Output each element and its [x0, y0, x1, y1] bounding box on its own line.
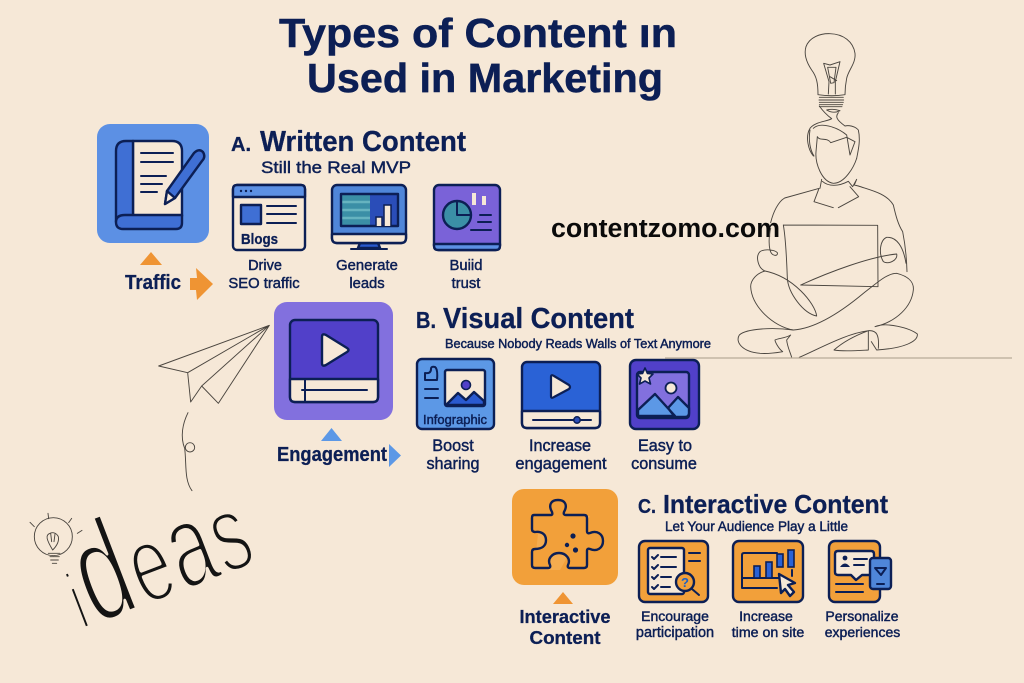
- icon: puzzle piece tile: [512, 489, 618, 585]
- heading: written content: Written Content: [260, 126, 466, 158]
- labels: interactive content benefits: time on site: [732, 625, 804, 641]
- label: traffic: Traffic: [125, 272, 181, 294]
- labels: written content benefits: Drive: [248, 258, 282, 274]
- label: interactive content: Interactive: [520, 606, 610, 627]
- heading: interactive content: C.: [638, 496, 656, 518]
- labels: written content benefits: [228, 258, 482, 292]
- icon: monitor dashboard: [332, 185, 406, 249]
- heading: interactive content: Interactive Content: [663, 489, 888, 519]
- title: Types of Content ın: [279, 10, 677, 56]
- title: [279, 10, 677, 101]
- icon: orange up triangle: [553, 592, 573, 604]
- icon: quiz checklist: ?: [681, 575, 689, 590]
- arrow: engagement: [389, 444, 401, 467]
- labels: written content benefits: Buiid: [450, 258, 482, 274]
- label: engagement: Engagement: [277, 444, 387, 466]
- icon: video player tile: [274, 302, 393, 420]
- labels: written content benefits: SEO traffic: [228, 276, 300, 292]
- panel: interactive content: [512, 489, 900, 648]
- labels: visual content benefits: consume: [631, 455, 697, 473]
- handwritten word: ideas: ideas: [37, 444, 272, 659]
- floor line: [665, 357, 1012, 359]
- icon: orange up triangle: [140, 252, 162, 265]
- labels: interactive content benefits: Personalize: [825, 608, 899, 624]
- labels: written content benefits: Generate: [336, 258, 398, 274]
- labels: interactive content benefits: [636, 608, 900, 641]
- subtitle: let your audience play a little: Let Your Audience Play a Little: [665, 519, 848, 534]
- label: interactive content: [520, 606, 610, 648]
- panel: visual content: [274, 302, 711, 473]
- illustration: paper plane with trail: [159, 325, 269, 491]
- icon: chart with cursor: [733, 541, 803, 602]
- icon: quiz checklist: [639, 541, 708, 602]
- heading: visual content: Visual Content: [443, 303, 634, 335]
- icon: notebook and pencil tile: [97, 124, 209, 243]
- icon: blogs browser: [233, 185, 305, 250]
- labels: visual content benefits: Boost: [432, 437, 474, 455]
- labels: visual content benefits: sharing: [426, 455, 480, 473]
- label: interactive content: Content: [530, 627, 600, 648]
- title: Used in Marketing: [307, 55, 663, 101]
- illustration: small lightbulb: [30, 513, 82, 563]
- icon: blue up triangle: [321, 428, 342, 441]
- labels: interactive content benefits: Increase: [739, 608, 793, 624]
- icon: blogs browser: Blogs: [241, 232, 278, 248]
- labels: written content benefits: trust: [452, 276, 480, 292]
- icon: image with star: [630, 360, 699, 429]
- panel: written content: [97, 124, 500, 300]
- labels: interactive content benefits: participation: [636, 625, 714, 641]
- labels: visual content benefits: Increase: [529, 437, 591, 455]
- labels: visual content benefits: Easy to: [638, 437, 692, 455]
- labels: written content benefits: leads: [349, 276, 385, 292]
- labels: visual content benefits: engagement: [515, 455, 607, 473]
- icon: infographic: Infographic: [423, 413, 487, 427]
- subtitle: still the real mvp: Still the Real MVP: [261, 158, 411, 177]
- icon: trust report: [434, 185, 500, 250]
- website label: contentzomo.com: [551, 215, 780, 243]
- arrow: traffic: [190, 268, 213, 300]
- heading: visual content: B.: [416, 307, 436, 333]
- labels: interactive content benefits: experiences: [825, 624, 900, 640]
- heading: written content: A.: [231, 134, 251, 156]
- icon: infographic: [417, 359, 494, 429]
- icon: video slider: [522, 362, 600, 428]
- labels: interactive content benefits: Encourage: [641, 608, 709, 624]
- icon: personalized profile and phone: [829, 541, 891, 602]
- labels: visual content benefits: [426, 437, 697, 473]
- subtitle: because nobody reads walls of text anymore: Because Nobody Reads Walls of Text Anymore: [445, 337, 711, 351]
- illustration: person with lightbulb and laptop: [738, 34, 917, 357]
